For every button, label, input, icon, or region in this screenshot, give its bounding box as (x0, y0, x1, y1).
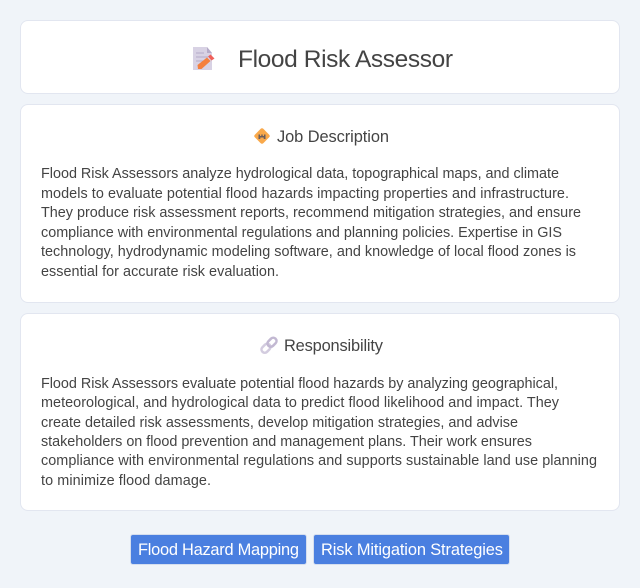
text block: responsibility: compliance with environmental regulations and supports sustainable land use planning (41, 453, 597, 469)
text block: job description (41, 166, 581, 280)
text block: job description: technology, hydrodynamic modeling software, and knowledge of local flood zones is (41, 244, 576, 260)
title: Flood Risk Assessor (238, 46, 453, 73)
text block: responsibility: meteorological, and hydrological data to predict flood likelihood and impact. They (41, 395, 560, 411)
text block: responsibility (41, 376, 597, 489)
text block: job description: essential for accurate risk evaluation. (41, 264, 279, 280)
heading: responsibility: Responsibility (284, 337, 384, 355)
panel: job description (20, 104, 620, 303)
text block: responsibility: Flood Risk Assessors evaluate potential flood hazards by analyzing geographical, (41, 376, 558, 392)
text block: job description: They produce risk assessment reports, recommend mitigation strategies, and ensure (41, 205, 581, 221)
tag button: Risk Mitigation Strategies (313, 534, 510, 565)
tag label: Flood Hazard Mapping: Flood Hazard Mapping (138, 541, 299, 559)
tag label: Risk Mitigation Strategies: Risk Mitigation Strategies (321, 541, 503, 559)
text block: responsibility: stakeholders on flood prevention and management plans. Their work ensures (41, 434, 532, 450)
icon: document with pencil (193, 47, 214, 70)
tag button: Flood Hazard Mapping (130, 534, 307, 565)
text block: job description: compliance with environmental regulations and planning policies. Expertise in GIS (41, 225, 562, 241)
text block: responsibility: to minimize flood damage. (41, 473, 211, 489)
text block: job description: Flood Risk Assessors analyze hydrological data, topographical maps, and climate (41, 166, 559, 182)
panel: header (20, 20, 620, 94)
text block: job description: models to evaluate potential flood hazards impacting properties and infrastructure. (41, 186, 569, 202)
icon: chain link (260, 336, 278, 354)
icon: diamond warning sign (254, 128, 270, 144)
heading: job description: Job Description (277, 128, 389, 146)
text block: responsibility: create detailed risk assessments, develop mitigation strategies, and advise (41, 415, 518, 431)
panel: responsibility (20, 313, 620, 511)
